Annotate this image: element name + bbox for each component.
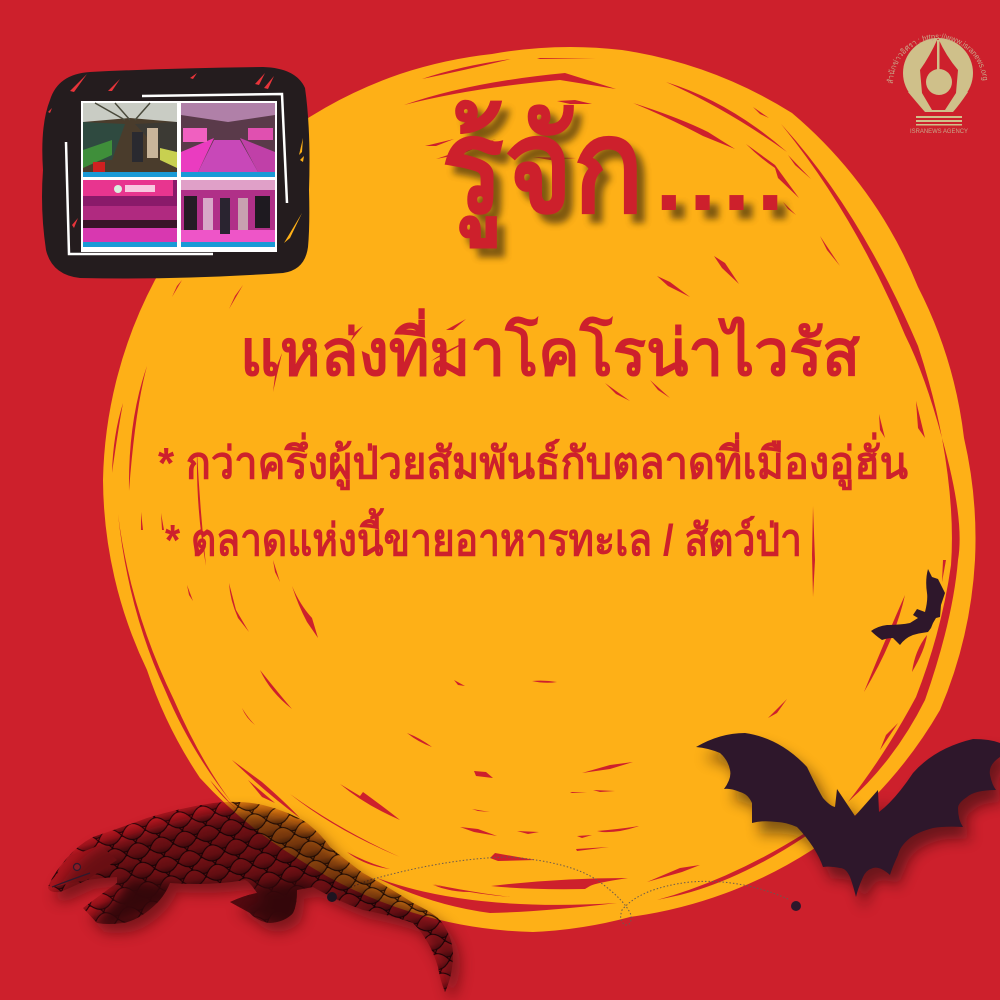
photo frame: wet market collage — [42, 67, 310, 278]
photo: pink-lit aisle — [181, 103, 275, 177]
logo: Isranews Agency: ISRANEWS AGENCY — [910, 128, 969, 135]
title: รู้จัก — [449, 102, 652, 258]
icon: large bat — [696, 733, 1000, 909]
illustration: pangolin — [48, 802, 460, 1000]
photo grid white mount — [81, 101, 277, 252]
heading: แหล่งที่มาโคโรน่าไวรัส — [240, 308, 860, 389]
logo: Isranews Agency: สำนักข่าวอิศรา : https://www.isranews.org — [886, 34, 988, 84]
dotted flight path — [332, 857, 788, 925]
dot marker right — [791, 901, 801, 911]
title — [441, 93, 799, 258]
title: .... — [655, 120, 790, 232]
black brushed frame — [42, 67, 310, 278]
white hand-drawn strokes — [66, 94, 287, 254]
icon: small bat — [871, 569, 945, 645]
title: รู้จัก — [441, 93, 644, 249]
dot marker left — [327, 892, 337, 902]
bullet: market sells seafood and wildlife: * ตลาดแห่งนี้ขายอาหารทะเล / สัตว์ป่า — [165, 507, 802, 565]
title: .... — [664, 129, 799, 241]
moon circle with brush slashes — [103, 47, 976, 932]
bullet: more than half of patients: * กว่าครึ่งผู้ป่วยสัมพันธ์กับตลาดที่เมืองอู่ฮั่น — [158, 432, 908, 490]
logo: Isranews Agency — [886, 34, 988, 135]
photo: pink market stall — [83, 180, 177, 247]
photo: shoppers at meat stall — [181, 180, 275, 247]
photo: market aisle — [83, 103, 177, 177]
